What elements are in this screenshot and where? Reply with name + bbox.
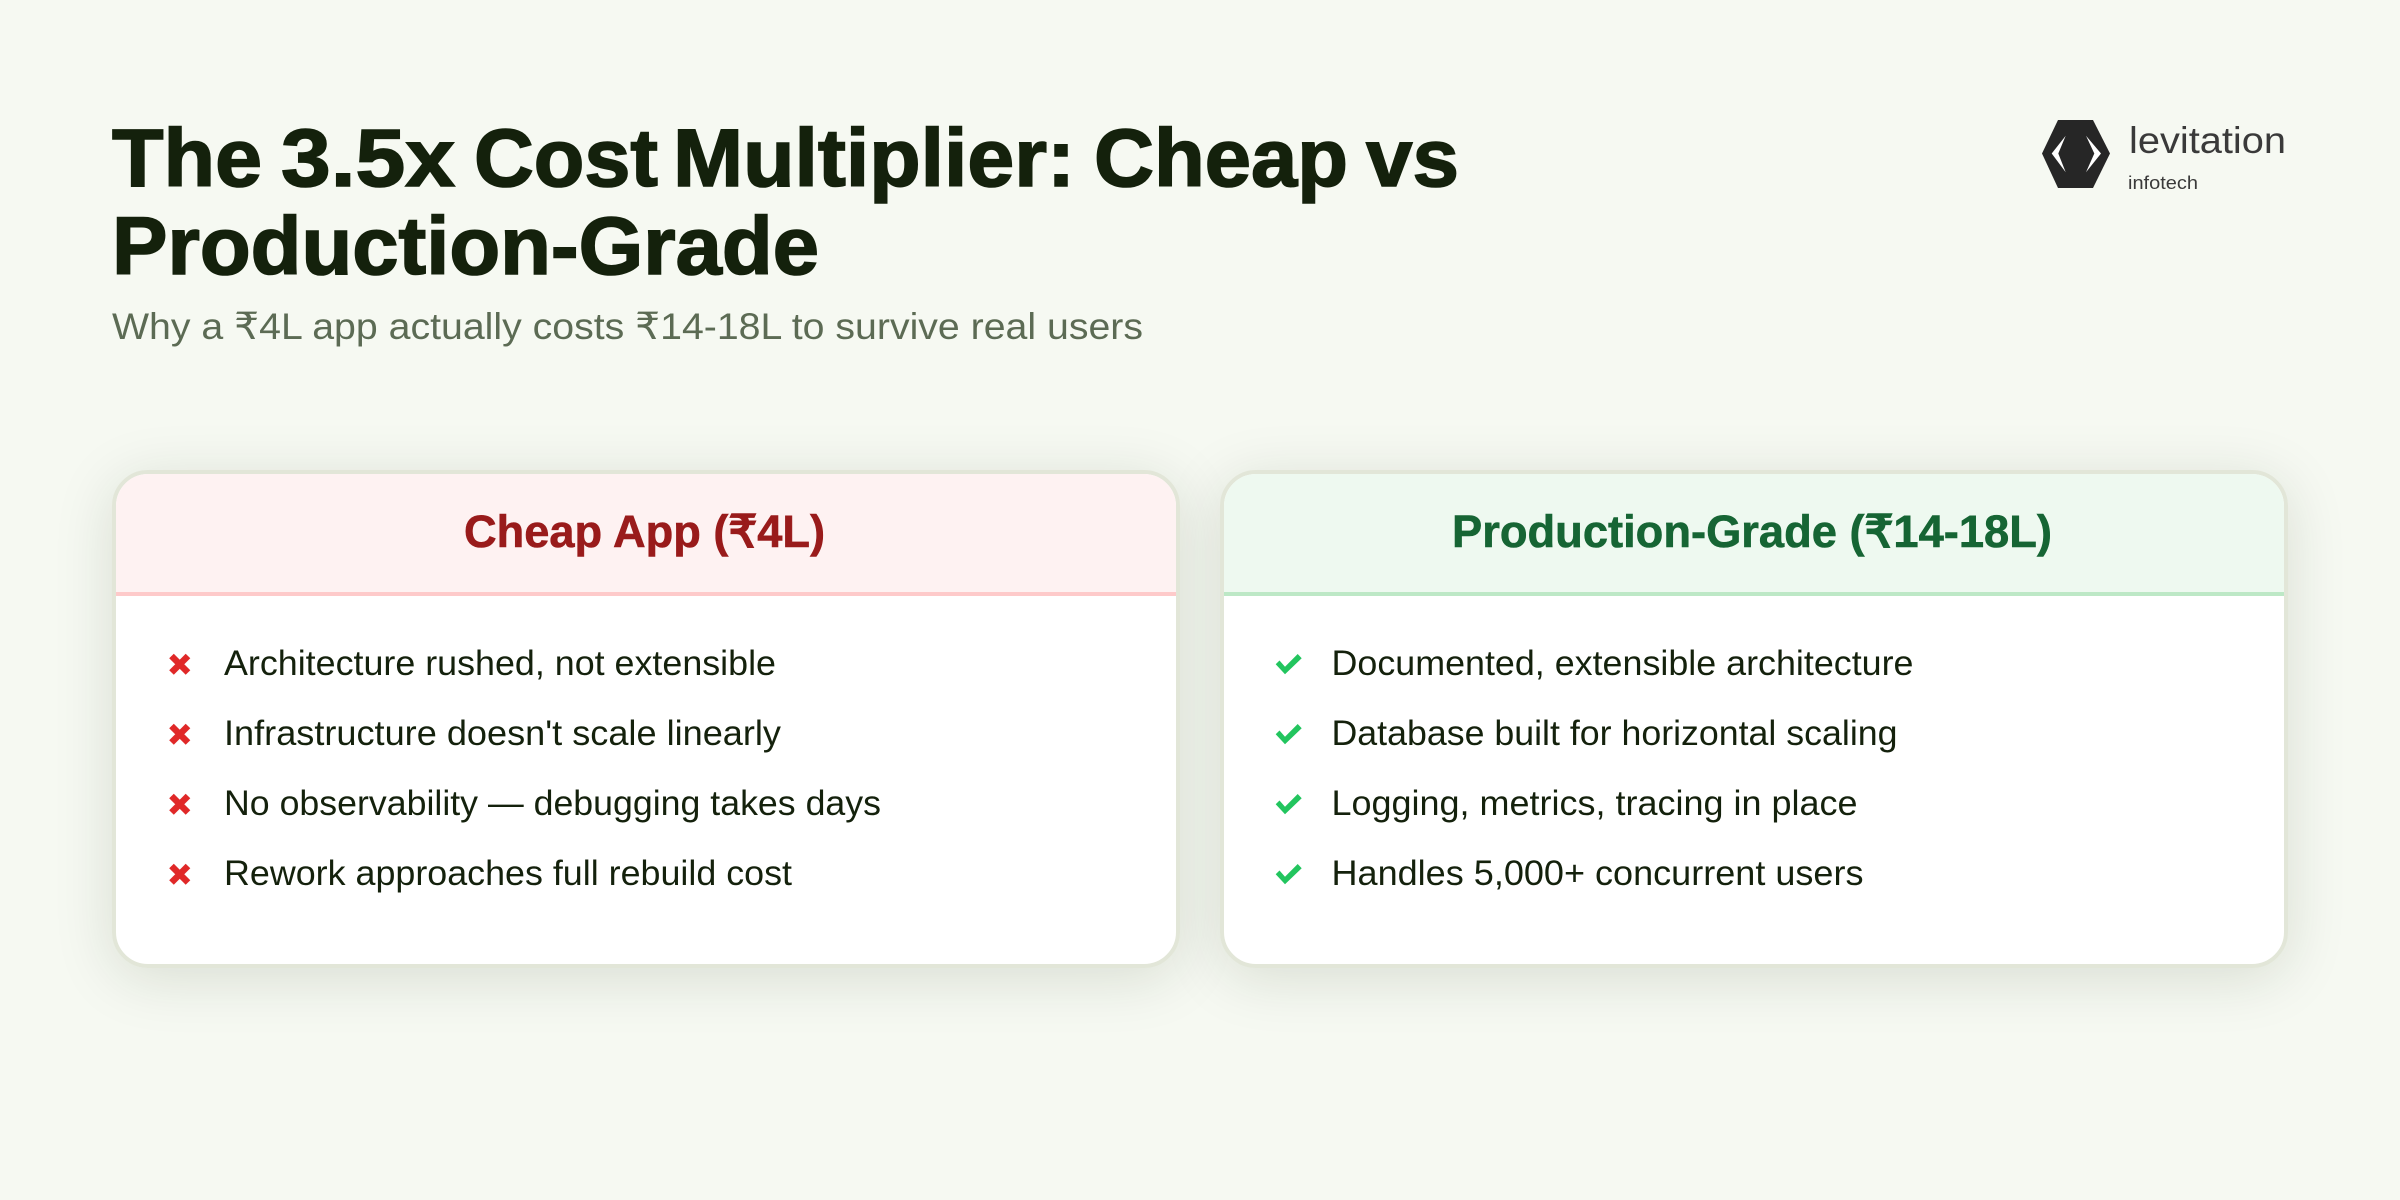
title: Cheap	[1094, 113, 1348, 204]
logo: levitation infotech	[2042, 120, 2286, 193]
subtitle: Why a ₹4L app actually costs ₹14-18L to survive real users	[112, 305, 1143, 347]
header: production-grade	[1224, 474, 2284, 596]
title: Cost	[474, 113, 658, 204]
icon: check 4	[1276, 864, 1302, 884]
icon: check 3	[1276, 794, 1302, 814]
item 1: Architecture rushed, not extensible	[224, 644, 776, 683]
item 1: Documented, extensible architecture	[1332, 644, 1914, 683]
header: cheap app: Cheap App (₹4L)	[464, 506, 825, 557]
title: vs	[1366, 113, 1459, 204]
logo wordmark: levitation	[2129, 120, 2286, 161]
item 3: Logging, metrics, tracing in place	[1332, 784, 1858, 823]
logo wordmark: infotech	[2128, 173, 2198, 193]
icon: check 1	[1276, 654, 1302, 674]
panel: production-grade	[1220, 470, 2288, 968]
icon: hexagon with chevrons	[2042, 120, 2110, 188]
icon: check 2	[1276, 724, 1302, 744]
icon: cross 3	[172, 796, 188, 812]
item 3: No observability — debugging takes days	[224, 784, 881, 823]
icon: cross 4	[172, 866, 188, 882]
title: Production-Grade	[112, 201, 819, 292]
icon: cross 2	[172, 726, 188, 742]
title: The	[112, 113, 262, 204]
item 2: Infrastructure doesn't scale linearly	[224, 714, 782, 753]
logo wordmark	[2128, 120, 2286, 193]
item 2: Database built for horizontal scaling	[1332, 714, 1898, 753]
item 4: Rework approaches full rebuild cost	[224, 854, 792, 893]
header: production-grade: Production-Grade (₹14-18L)	[1452, 506, 2052, 557]
title	[112, 113, 1459, 292]
icon: cross 1	[172, 656, 188, 672]
panel: cheap app	[112, 470, 1180, 968]
header: cheap app	[116, 474, 1176, 596]
title: 3.5x	[281, 113, 455, 204]
item 4: Handles 5,000+ concurrent users	[1332, 854, 1864, 893]
title: Multiplier:	[673, 113, 1075, 204]
